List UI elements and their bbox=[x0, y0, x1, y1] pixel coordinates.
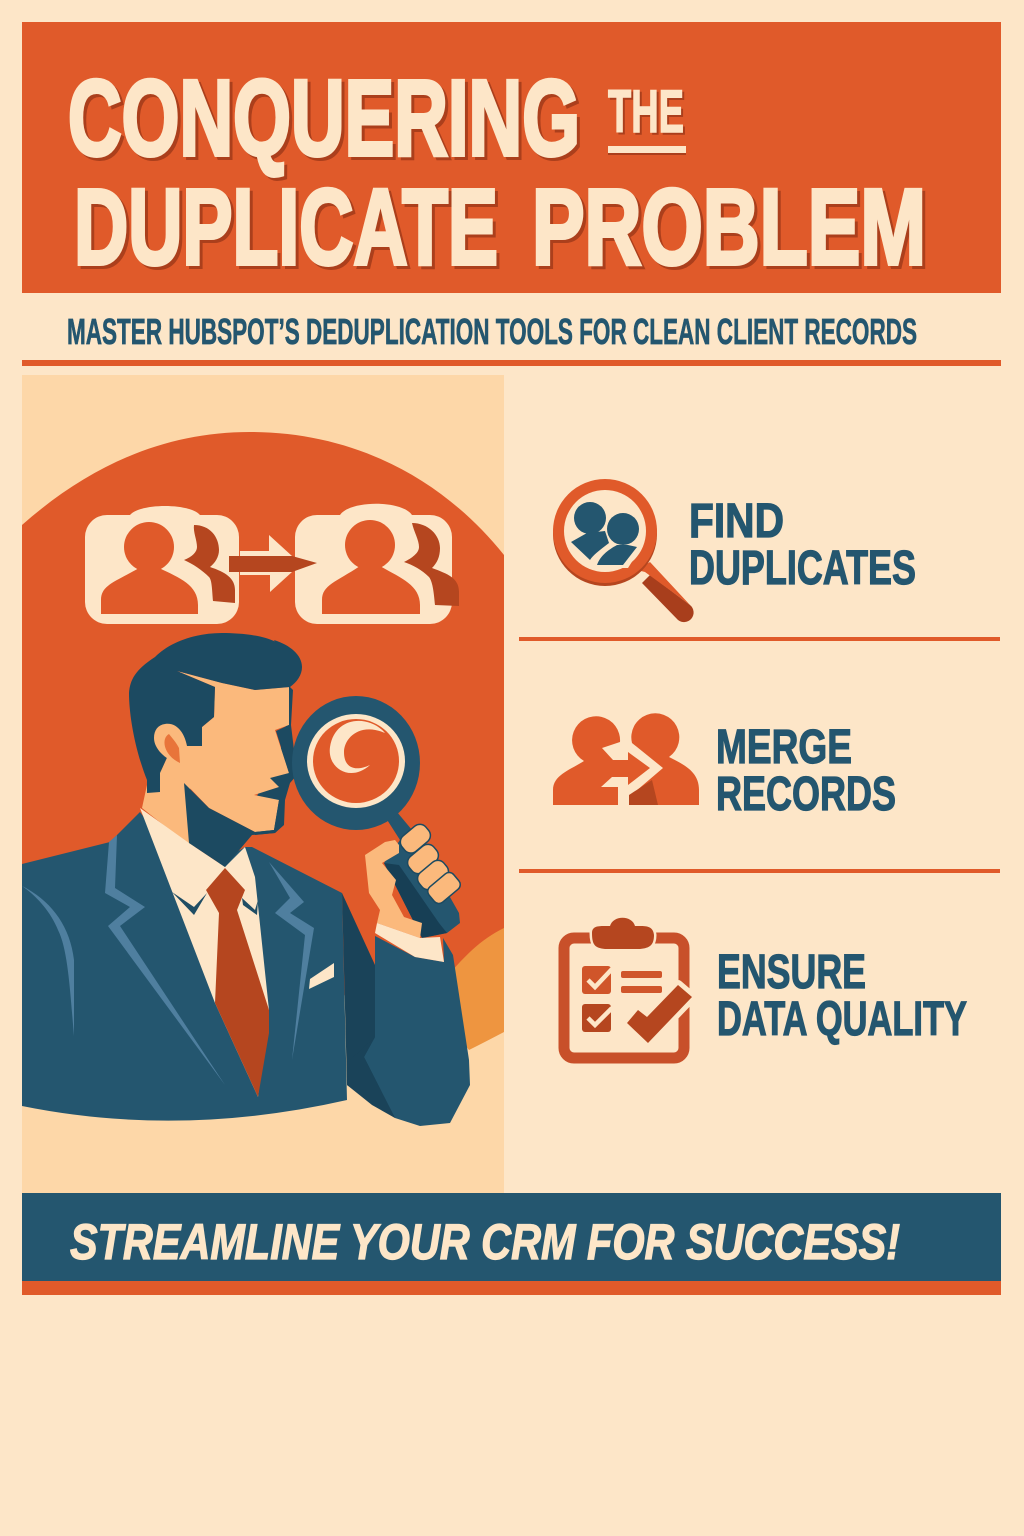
label: merge records: MERGE bbox=[716, 721, 852, 774]
label: find duplicates: DUPLICATES bbox=[689, 542, 916, 595]
title: THE bbox=[610, 80, 686, 147]
title: DUPLICATE bbox=[77, 169, 501, 290]
title: THE bbox=[608, 78, 684, 145]
shirt cuff bbox=[375, 923, 444, 962]
icon: left contact card bbox=[85, 506, 239, 624]
icon: clipboard checklist bbox=[564, 918, 692, 1058]
lapels bbox=[22, 835, 314, 1085]
icon: merging people bbox=[553, 713, 699, 805]
arrow bbox=[229, 535, 317, 592]
title: CONQUERING bbox=[71, 60, 583, 181]
label: merge records bbox=[716, 721, 896, 821]
panel: merge records bbox=[553, 713, 896, 821]
label: find duplicates bbox=[689, 495, 916, 595]
panel: find duplicates bbox=[553, 479, 916, 622]
shirt bbox=[140, 808, 269, 1097]
beard shadow bbox=[184, 783, 284, 867]
jacket shadow bbox=[342, 893, 395, 1118]
label: merge records: RECORDS bbox=[716, 768, 896, 821]
panel: illustration bbox=[22, 375, 504, 1193]
light orange arc bbox=[400, 900, 504, 1050]
hand bbox=[365, 821, 463, 938]
handle bbox=[384, 812, 460, 938]
hair bbox=[129, 633, 302, 793]
footer banner bbox=[22, 1193, 1001, 1295]
lens swirl bbox=[330, 721, 385, 773]
title: DUPLICATE bbox=[74, 166, 498, 287]
icon: duplicate contacts merging bbox=[85, 504, 459, 624]
icon: right contact card bbox=[295, 504, 459, 624]
ear bbox=[154, 724, 187, 764]
neck bbox=[142, 770, 195, 850]
label: find duplicates: FIND bbox=[689, 495, 784, 548]
magnifying glass bbox=[292, 696, 460, 938]
title bbox=[68, 57, 929, 290]
panel: ensure data quality bbox=[564, 918, 967, 1058]
title: CONQUERING bbox=[68, 57, 580, 178]
collar shadows bbox=[172, 892, 258, 915]
pocket square bbox=[309, 963, 334, 989]
orange arch background bbox=[22, 432, 504, 1000]
face outline bbox=[255, 685, 297, 835]
face bbox=[160, 671, 289, 832]
suit jacket bbox=[22, 812, 347, 1121]
icon: magnifier with people bbox=[553, 479, 694, 622]
suit sleeve bbox=[364, 936, 470, 1126]
tie bbox=[206, 868, 269, 1097]
figure: businessman with magnifying glass bbox=[22, 633, 470, 1126]
label: ensure data quality: ENSURE bbox=[717, 946, 866, 999]
panel: header banner bbox=[22, 22, 1001, 293]
label: ensure data quality bbox=[717, 946, 967, 1046]
